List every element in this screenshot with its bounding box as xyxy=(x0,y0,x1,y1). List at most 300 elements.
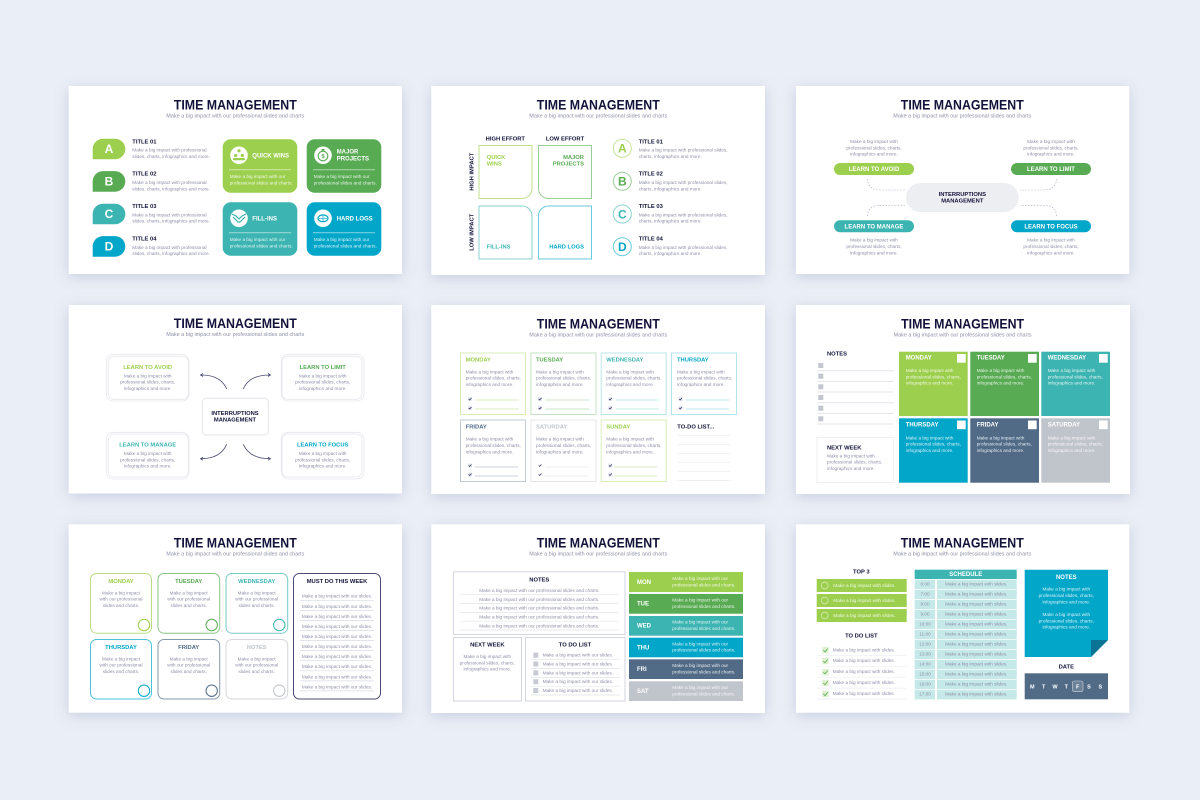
notes list: NOTES xyxy=(827,352,847,358)
text: limit: professional slides, charts, xyxy=(1023,145,1079,150)
schedule table: Make a big impact with slides. xyxy=(945,591,1007,596)
card: friday: FRIDAY xyxy=(178,645,199,651)
panel: slide 1 quick wins list xyxy=(69,86,402,274)
quadrant: quick wins xyxy=(479,146,532,199)
date bar: S xyxy=(1098,684,1102,690)
tile: friday: infographics and more. xyxy=(977,448,1024,453)
card: wednesday xyxy=(226,574,288,633)
list item 03: slides, charts, infographics and more. xyxy=(132,219,210,224)
notes box: Make a big impact with our professional slides and charts. xyxy=(479,614,599,620)
card: fill-ins: Make a big impact with our xyxy=(230,237,286,242)
list item 02: slides, charts, infographics and more. xyxy=(132,186,210,191)
day card: tuesday: Make a big impact with xyxy=(536,369,584,374)
center pill: MANAGEMENT xyxy=(941,199,984,205)
list item 02 xyxy=(639,172,728,191)
box: learn to manage: Make a big impact with xyxy=(124,451,172,456)
tile: friday xyxy=(970,418,1039,483)
box: learn to avoid: professional slides, charts, xyxy=(120,380,175,385)
notes box: NOTES xyxy=(529,577,549,583)
list item 04 xyxy=(639,236,728,256)
badge B: B xyxy=(618,175,627,189)
card: major projects: MAJOR xyxy=(337,150,359,156)
bar: wed: WED xyxy=(637,624,652,630)
card: wednesday: WEDNESDAY xyxy=(238,579,275,585)
day card: tuesday xyxy=(531,353,596,414)
schedule table: Make a big impact with slides. xyxy=(945,611,1007,616)
day card: wednesday: professional slides, charts, xyxy=(606,376,662,381)
next week box: professional slides, charts, xyxy=(827,460,882,465)
panel: slide 8 notes and day bars xyxy=(431,524,765,713)
text: limit: infographics and more. xyxy=(1027,152,1075,157)
to do list box: Make a big impact with our slides. xyxy=(543,688,613,693)
day card: friday: professional slides, charts, xyxy=(466,443,521,448)
tile: tuesday: infographics and more. xyxy=(977,381,1024,386)
card: must do this week: Make a big impact with our slides. xyxy=(302,664,372,669)
card: notes xyxy=(226,640,288,699)
list item 01: TITLE 01 xyxy=(132,139,157,145)
schedule table: Make a big impact with slides. xyxy=(945,581,1007,586)
subtitle: Make a big impact with our professional slides and charts xyxy=(529,333,668,339)
quadrant: major projects xyxy=(538,146,592,199)
card: must do this week: Make a big impact with our slides. xyxy=(302,604,372,609)
to-do list xyxy=(677,425,731,480)
list item 03: charts, infographics and more. xyxy=(639,219,702,224)
day card: thursday: infographics and more. xyxy=(677,382,725,387)
box: learn to limit: professional slides, charts, xyxy=(295,380,350,385)
card: notes: NOTES xyxy=(247,645,267,651)
box: learn to avoid: infographics and more. xyxy=(124,386,172,391)
card: must do this week: Make a big impact with our slides. xyxy=(302,654,372,659)
day card: tuesday: professional slides, charts, xyxy=(536,376,591,381)
tab B xyxy=(93,171,125,192)
to do list box xyxy=(526,638,625,701)
pill: learn to limit xyxy=(1011,163,1091,175)
day card: saturday: Make a big impact with xyxy=(536,437,584,442)
schedule table: 12:00 xyxy=(919,642,931,646)
top 3 bars: Make a big impact with slides. xyxy=(833,583,896,588)
bar: fri: FRI xyxy=(637,667,647,673)
quadrant: hard logs xyxy=(538,206,592,259)
box: learn to manage xyxy=(106,432,189,479)
title: TIME MANAGEMENT xyxy=(901,316,1024,332)
card: must do this week: Make a big impact with our slides. xyxy=(302,674,372,679)
card: thursday xyxy=(90,640,152,699)
card: tuesday: slides and charts. xyxy=(170,603,207,608)
next week box: NEXT WEEK xyxy=(470,643,505,649)
to do list rows: Make a big impact with slides. xyxy=(833,691,895,696)
bar: mon: MON xyxy=(637,580,651,586)
box: learn to focus: Make a big impact with xyxy=(299,451,347,456)
tile: thursday: Make a big impact with xyxy=(906,435,954,440)
day card: monday: infographics and more. xyxy=(466,382,513,387)
box: learn to limit: LEARN TO LIMIT xyxy=(300,365,346,371)
card: thursday: with our professional xyxy=(100,663,142,668)
sticky note: professional slides, charts, xyxy=(1039,618,1094,623)
bar: fri: professional slides and charts. xyxy=(672,669,735,674)
tab D xyxy=(93,236,125,257)
day card: wednesday: WEDNESDAY xyxy=(606,358,644,364)
next week box: infographics and more. xyxy=(827,466,875,471)
schedule table: 10:00 xyxy=(919,621,931,626)
list item 03: TITLE 03 xyxy=(132,204,157,210)
tile: friday: Make a big impact with xyxy=(977,435,1025,440)
bar: fri: Make a big impact with our xyxy=(672,663,728,668)
card: tuesday: TUESDAY xyxy=(175,579,202,585)
card: tuesday: with our professional xyxy=(167,597,210,602)
card: notes: with our professional xyxy=(235,663,278,668)
text: avoid: professional slides, charts, xyxy=(846,145,902,150)
card: must do this week: Make a big impact with our slides. xyxy=(302,624,372,629)
list item 04 xyxy=(132,236,210,256)
to do list rows: Make a big impact with slides. xyxy=(833,669,895,674)
card: wednesday: Make a big impact xyxy=(238,590,276,595)
box: learn to avoid: Make a big impact with xyxy=(124,373,172,378)
card: thursday: THURSDAY xyxy=(105,645,137,651)
list item 04: TITLE 04 xyxy=(639,236,664,242)
icon: people pyramid xyxy=(230,146,248,164)
next week box: Make a big impact with xyxy=(463,654,512,659)
card: monday: slides and charts. xyxy=(103,603,139,608)
next week box xyxy=(817,438,894,482)
date bar xyxy=(1025,673,1108,699)
schedule table: 15:00 xyxy=(919,672,931,677)
list item 02: Make a big impact with professional xyxy=(132,180,207,185)
tile: monday: Make a big impact with xyxy=(906,368,954,373)
tile: tuesday xyxy=(970,352,1039,416)
list item 01: Make a big impact with professional xyxy=(132,148,207,153)
card: notes: slides and charts. xyxy=(238,669,275,674)
bar: tue: Make a big impact with our xyxy=(672,598,728,603)
to do list box: Make a big impact with our slides. xyxy=(543,662,613,666)
text: manage xyxy=(846,238,902,255)
text: limit xyxy=(1023,139,1079,157)
card: monday: Make a big impact xyxy=(102,590,141,595)
center box xyxy=(202,398,268,435)
card: thursday: slides and charts. xyxy=(103,669,139,674)
day card: monday: Make a big impact with xyxy=(466,369,514,374)
schedule table: 8:00 xyxy=(920,601,930,606)
tile: thursday: infographics and more. xyxy=(906,448,953,453)
tile: wednesday: professional slides, charts, xyxy=(1048,374,1103,379)
center pill xyxy=(906,183,1019,212)
card: quick wins: QUICK WINS xyxy=(252,153,289,159)
tile: monday: MONDAY xyxy=(906,356,932,362)
day card: sunday: SUNDAY xyxy=(606,425,630,431)
card: monday xyxy=(90,574,152,633)
card: hard logs xyxy=(307,202,381,256)
tile: wednesday: WEDNESDAY xyxy=(1048,356,1086,362)
bar: sat: professional slides and charts. xyxy=(672,691,735,696)
sticky note: Make a big impact with xyxy=(1042,612,1091,617)
day card: thursday: Make a big impact with xyxy=(677,369,725,374)
bar: tue xyxy=(629,594,743,614)
icon: stopwatch: $ xyxy=(321,154,325,160)
sticky note: NOTES xyxy=(1056,575,1077,581)
text: focus xyxy=(1023,238,1079,255)
tab A xyxy=(93,139,125,159)
dashed connectors xyxy=(867,179,1057,216)
text: manage: Make a big impact with xyxy=(850,238,898,243)
tile: friday: professional slides, charts, xyxy=(977,442,1032,447)
text: avoid: infographics and more. xyxy=(850,152,898,157)
day card: sunday: infographics and more. xyxy=(606,449,654,454)
card: friday xyxy=(158,640,220,699)
pill: learn to avoid xyxy=(834,163,914,175)
panel: slide 9 schedule xyxy=(796,524,1129,713)
list item 04: Make a big impact with professional xyxy=(132,245,207,250)
top 3 heading: TOP 3 xyxy=(853,570,870,576)
schedule table: Make a big impact with slides. xyxy=(945,652,1007,656)
panel: slide 2 effort impact matrix xyxy=(431,86,765,275)
text: manage: infographics and more. xyxy=(850,250,898,255)
day card: friday xyxy=(460,420,526,482)
schedule table: 11:00 xyxy=(919,632,931,636)
tile: wednesday: infographics and more. xyxy=(1048,381,1095,386)
next week box: infographics and more. xyxy=(463,667,511,672)
title: TIME MANAGEMENT xyxy=(537,316,660,332)
badge A: A xyxy=(618,142,627,156)
center box: MANAGEMENT xyxy=(214,418,257,424)
day card: tuesday: TUESDAY xyxy=(536,358,563,364)
day card: monday xyxy=(460,353,526,414)
list item 01 xyxy=(639,139,728,159)
date bar: M xyxy=(1030,684,1035,690)
sticky note xyxy=(1025,570,1108,657)
tile: tuesday: TUESDAY xyxy=(977,356,1005,362)
card: monday: MONDAY xyxy=(108,579,134,585)
panel: slide 7 rounded week cards xyxy=(69,524,402,713)
schedule table: SCHEDULE xyxy=(949,572,982,578)
subtitle: Make a big impact with our professional slides and charts xyxy=(894,333,1032,339)
list item 02: Make a big impact with professional slides, xyxy=(639,180,728,185)
list item 04: Make a big impact with professional slides, xyxy=(639,245,728,250)
notes list xyxy=(817,352,893,424)
card: must do this week: MUST DO THIS WEEK xyxy=(307,579,368,585)
title: TIME MANAGEMENT xyxy=(174,315,297,331)
card: hard logs: professional slides and charts. xyxy=(314,243,377,248)
box: learn to avoid: LEARN TO AVOID xyxy=(123,365,172,371)
list item 02: TITLE 02 xyxy=(132,172,156,178)
card: tuesday: Make a big impact xyxy=(170,590,208,595)
box: learn to manage: LEARN TO MANAGE xyxy=(119,443,176,449)
to do list rows: Make a big impact with slides. xyxy=(833,680,895,685)
card: major projects: PROJECTS xyxy=(337,156,369,162)
quadrant: fill-ins xyxy=(479,206,532,259)
day card: friday: infographics and more. xyxy=(466,449,513,454)
tile: thursday: THURSDAY xyxy=(906,423,938,429)
to-do list: TO-DO LIST... xyxy=(677,425,715,431)
bar: tue: professional slides and charts. xyxy=(672,604,735,609)
schedule table: Make a big impact with slides. xyxy=(945,682,1007,687)
to do list box: Make a big impact with our slides. xyxy=(543,670,613,675)
to do list rows xyxy=(817,647,906,699)
text: avoid: Make a big impact with xyxy=(850,139,898,144)
schedule table xyxy=(915,570,1017,699)
badge A xyxy=(613,139,631,157)
subtitle: Make a big impact with our professional slides and charts xyxy=(166,332,305,338)
bar: sat xyxy=(629,681,743,701)
day card: thursday: professional slides, charts, xyxy=(677,376,732,381)
tile: saturday xyxy=(1041,418,1110,483)
title: TIME MANAGEMENT xyxy=(537,96,660,112)
bar: fri xyxy=(629,659,743,679)
day card: monday: MONDAY xyxy=(466,358,491,364)
title: TIME MANAGEMENT xyxy=(537,535,660,551)
day card: saturday: infographics and more. xyxy=(536,449,584,454)
bar: thu: THU xyxy=(637,645,649,651)
schedule table: Make a big impact with slides. xyxy=(945,621,1007,626)
card: hard logs: HARD LOGS xyxy=(337,216,373,222)
icon: handshake xyxy=(230,210,248,227)
list item 02: charts, infographics and more. xyxy=(639,186,702,191)
text: focus: infographics and more. xyxy=(1027,250,1075,255)
next week box: NEXT WEEK xyxy=(827,445,862,451)
next week box: professional slides, charts, xyxy=(460,660,515,665)
badge D xyxy=(613,238,631,256)
day card: wednesday xyxy=(601,353,666,414)
tile: thursday xyxy=(899,418,968,483)
tile: saturday: infographics and more. xyxy=(1048,448,1095,453)
center box: INTERRUPTIONS xyxy=(211,411,259,417)
subtitle: Make a big impact with our professional slides and charts xyxy=(166,114,305,120)
notes box: Make a big impact with our professional slides and charts. xyxy=(479,623,599,628)
sticky note: Make a big impact with xyxy=(1042,587,1091,592)
list item 01: charts, infographics and more. xyxy=(639,154,702,159)
card: thursday: Make a big impact xyxy=(102,656,141,661)
badge B xyxy=(613,172,631,190)
tile: tuesday: professional slides, charts, xyxy=(977,374,1032,379)
schedule table: 17:00 xyxy=(919,692,931,697)
date bar: S xyxy=(1087,684,1091,690)
schedule table: Make a big impact with slides. xyxy=(945,642,1007,646)
to do list rows: Make a big impact with slides. xyxy=(833,647,895,652)
day card: friday: FRIDAY xyxy=(466,425,487,431)
top 3 bars xyxy=(817,579,907,622)
list item 03: Make a big impact with professional slides, xyxy=(639,212,728,218)
box: learn to manage: professional slides, charts, xyxy=(120,457,175,462)
card: quick wins xyxy=(223,139,297,193)
bar: wed xyxy=(629,616,743,636)
list item 03 xyxy=(639,204,728,224)
subtitle: Make a big impact with our professional slides and charts xyxy=(529,552,668,558)
schedule table: 7:00 xyxy=(920,591,930,596)
bar: mon: Make a big impact with our xyxy=(672,576,728,581)
notes box: Make a big impact with our professional slides and charts. xyxy=(479,588,599,593)
card: friday: slides and charts. xyxy=(170,669,207,674)
notes box: Make a big impact with our professional slides and charts. xyxy=(479,597,599,602)
card: friday: with our professional xyxy=(167,663,210,668)
list item 01 xyxy=(132,139,210,159)
badge C: C xyxy=(618,207,627,221)
card: must do this week: Make a big impact with our slides. xyxy=(302,614,372,619)
box: learn to focus: infographics and more. xyxy=(299,464,347,469)
title: TIME MANAGEMENT xyxy=(174,96,297,112)
box: learn to limit xyxy=(281,354,364,401)
to do list box: Make a big impact with our slides. xyxy=(543,679,613,684)
day card: wednesday: infographics and more. xyxy=(606,382,654,387)
column header: low effort: LOW EFFORT xyxy=(546,137,585,143)
bar: wed: Make a big impact with our xyxy=(672,620,728,625)
pill: learn to limit: LEARN TO LIMIT xyxy=(1027,167,1075,173)
schedule table: Make a big impact with slides. xyxy=(945,601,1007,606)
text: focus: professional slides, charts, xyxy=(1023,244,1079,249)
subtitle: Make a big impact with our professional slides and charts xyxy=(166,552,305,558)
row header: low impact: LOW IMPACT xyxy=(470,213,476,251)
card: friday: Make a big impact xyxy=(170,656,208,661)
tile: wednesday xyxy=(1041,352,1110,416)
card: fill-ins: FILL-INS xyxy=(252,216,277,222)
day card: sunday xyxy=(601,420,666,482)
tile: wednesday: Make a big impact with xyxy=(1048,368,1096,373)
text: limit: Make a big impact with xyxy=(1027,139,1075,144)
bar: mon: professional slides and charts. xyxy=(672,582,735,587)
schedule table: Make a big impact with slides. xyxy=(945,662,1007,667)
badge D: D xyxy=(618,240,627,254)
tab B: B xyxy=(105,174,114,188)
card: fill-ins: professional slides and charts. xyxy=(230,243,293,248)
schedule table: 6:00 xyxy=(920,581,930,586)
quadrant: major projects: MAJOR xyxy=(563,155,585,161)
top 3 bars: Make a big impact with slides. xyxy=(833,613,896,618)
day card: sunday: Make a big impact with xyxy=(606,437,654,442)
date bar: T xyxy=(1065,684,1069,690)
title: TIME MANAGEMENT xyxy=(174,535,297,551)
curved arrows xyxy=(200,374,270,460)
card: wednesday: with our professional xyxy=(235,597,278,602)
to do list heading: TO DO LIST xyxy=(845,634,878,640)
quadrant: quick wins: WINS xyxy=(487,162,502,168)
to do list box: Make a big impact with our slides. xyxy=(543,653,613,658)
sticky note: infographics and more. xyxy=(1042,599,1090,604)
day card: thursday: THURSDAY xyxy=(677,358,709,364)
pill: learn to avoid: LEARN TO AVOID xyxy=(849,167,900,173)
card: major projects: professional slides and charts. xyxy=(314,180,377,185)
date bar: T xyxy=(1042,684,1046,690)
icon: brain xyxy=(314,210,332,227)
day card: friday: Make a big impact with xyxy=(466,437,514,442)
panel: slide 5 weekly checklist xyxy=(431,305,765,494)
box: learn to manage: infographics and more. xyxy=(124,464,172,469)
quadrant: fill-ins: FILL-INS xyxy=(487,244,511,250)
list item 04: charts, infographics and more. xyxy=(639,251,702,256)
center pill: INTERRUPTIONS xyxy=(939,192,986,198)
tab D: D xyxy=(105,239,114,253)
day card: wednesday: Make a big impact with xyxy=(606,369,654,374)
panel: slide 3 interruptions pills xyxy=(796,86,1129,274)
date heading: DATE xyxy=(1059,665,1074,671)
card: quick wins: professional slides and charts. xyxy=(230,180,293,185)
subtitle: Make a big impact with our professional slides and charts xyxy=(893,552,1032,558)
text: manage: professional slides, charts, xyxy=(846,244,902,249)
card: must do this week: Make a big impact with our slides. xyxy=(302,594,372,599)
notes box xyxy=(454,572,625,634)
sticky note: professional slides, charts, xyxy=(1039,593,1094,598)
box: learn to focus: professional slides, charts, xyxy=(295,457,350,462)
bar: thu: Make a big impact with our xyxy=(672,641,728,646)
tile: monday: infographics and more. xyxy=(906,381,953,386)
card: must do this week: Make a big impact with our slides. xyxy=(302,644,372,649)
date bar: F xyxy=(1076,684,1080,690)
tile: friday: FRIDAY xyxy=(977,423,998,429)
schedule table: 9:00 xyxy=(920,611,930,616)
card: major projects xyxy=(307,139,381,193)
pill: learn to manage: LEARN TO MANAGE xyxy=(845,224,903,230)
pill: learn to manage xyxy=(834,220,914,232)
day card: tuesday: infographics and more. xyxy=(536,382,584,387)
pill: learn to focus xyxy=(1011,220,1091,232)
list item 02: TITLE 02 xyxy=(639,172,663,178)
tile: saturday: Make a big impact with xyxy=(1048,435,1096,440)
